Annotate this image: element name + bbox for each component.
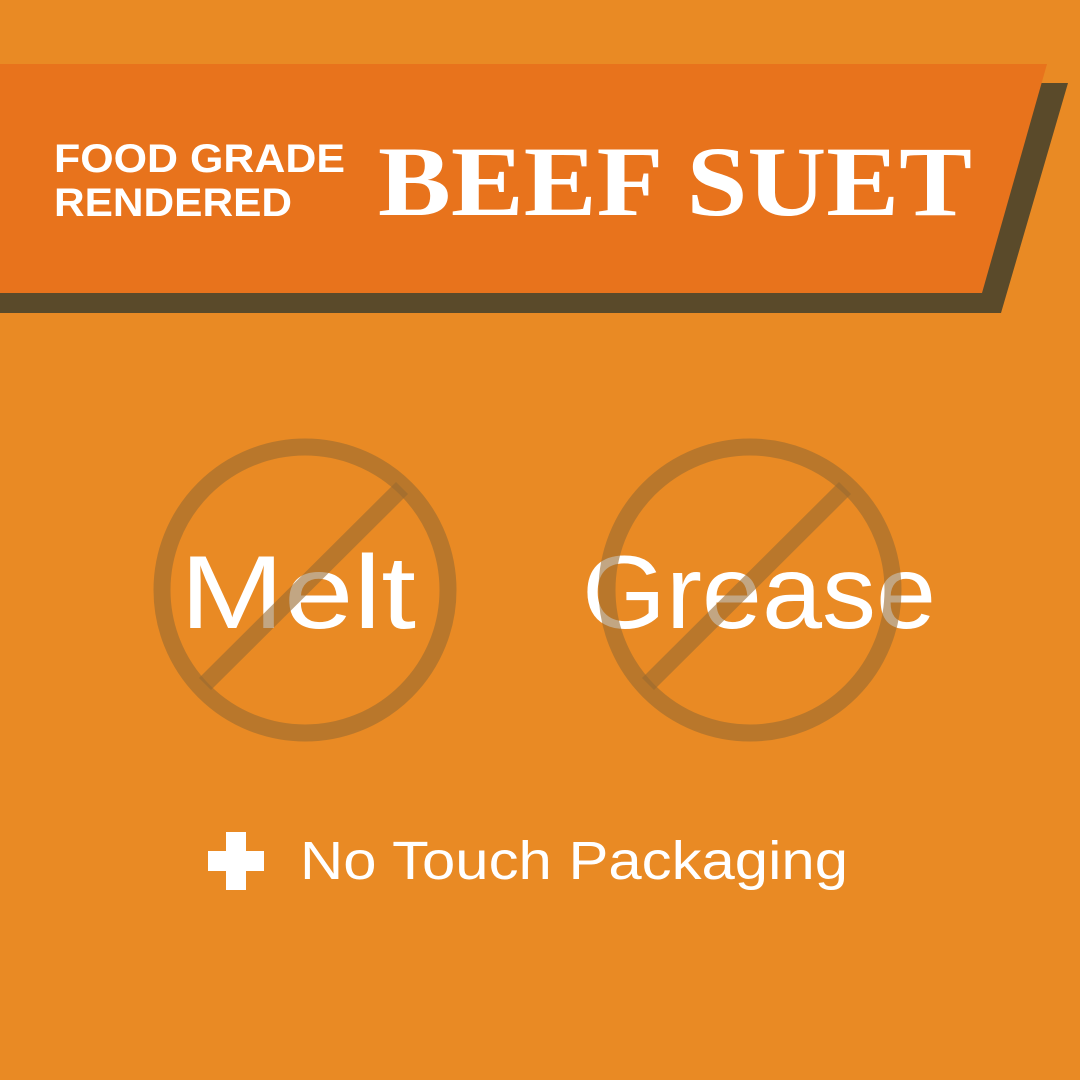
banner subtitle: FOOD GRADE	[54, 137, 345, 181]
icon: no grease	[582, 447, 936, 733]
icon: no melt	[162, 447, 448, 733]
icon: plus	[208, 832, 264, 890]
icon: no melt: Melt	[180, 535, 416, 651]
banner shadow	[0, 83, 1068, 313]
icon: no grease: Grease	[582, 535, 936, 651]
title: BEEF SUET	[378, 126, 972, 237]
banner subtitle line 2: RENDERED	[54, 181, 292, 225]
text: no touch packaging: No Touch Packaging	[300, 831, 848, 891]
banner body	[0, 64, 1047, 293]
